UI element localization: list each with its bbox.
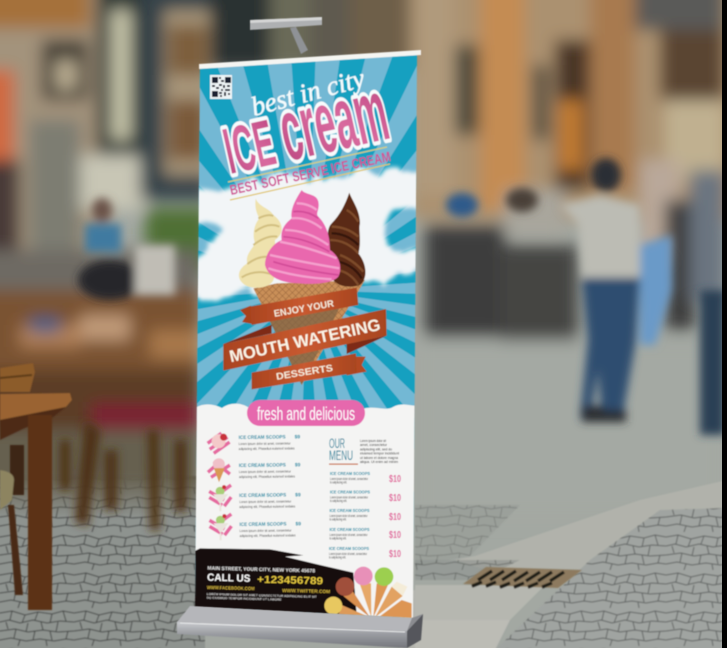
priced item 5: Lorem ipsum dolor sit amet, consectetur	[329, 552, 368, 556]
priced item 4: ICE CREAM SCOOPS	[330, 527, 370, 532]
banner hanger bar	[250, 17, 322, 54]
menu item 1: $9	[295, 434, 300, 440]
contact text: WWW.FACEBOOK.COM	[207, 585, 255, 591]
ribbon: enjoy your: ENJOY YOUR	[273, 299, 335, 320]
menu item 1: Lorem ipsum dolor sit amet, consectetur	[239, 441, 291, 446]
wooden table and chair, foreground left	[0, 363, 72, 610]
left menu column	[208, 432, 301, 540]
contact text: DO EIUSMOD TEMPOR INCIDIDUNT UT LABORE	[207, 596, 282, 602]
priced item 2: Lorem ipsum dolor sit amet, consectetur	[330, 496, 369, 500]
icon: waffle cones	[253, 280, 365, 385]
menu item 1: ICE CREAM SCOOPS	[239, 435, 286, 441]
ribbon: desserts	[252, 353, 367, 389]
menu item 4: Lorem ipsum dolor sit amet, consectetur	[240, 528, 292, 533]
heading: our menu: OUR	[329, 436, 345, 451]
icon: pink swirl	[265, 190, 340, 284]
roll-up banner poster: cream	[270, 61, 396, 180]
priced item 5: $10	[389, 549, 401, 560]
title: Ice Cream	[213, 61, 396, 193]
priced item 3: to adipiscing elit.	[330, 518, 347, 522]
menu intro paragraph: adipiscing elit, sed do	[360, 448, 392, 452]
right menu column	[329, 436, 401, 560]
menu item 4: ICE CREAM SCOOPS	[239, 522, 287, 528]
black brush contact strip	[193, 548, 412, 619]
heading: our menu: MENU	[329, 448, 353, 463]
drain grate	[463, 567, 582, 588]
contact text	[207, 566, 331, 603]
poster artwork	[194, 54, 418, 618]
icon: vanilla swirl	[239, 198, 282, 288]
cobblestone ground	[0, 476, 727, 648]
illustration: three ice cream cones with ribbons	[223, 190, 387, 389]
blurred cafe chair legs	[60, 420, 186, 530]
white lower panel	[190, 404, 420, 630]
priced item 2: to adipiscing elit.	[330, 499, 347, 503]
priced item 3: Lorem ipsum dolor sit amet, consectetur	[330, 514, 368, 518]
black strip at right edge	[722, 0, 727, 648]
priced item 1: $10	[389, 474, 401, 485]
ribbon: desserts: DESSERTS	[275, 363, 334, 383]
priced item 5: ICE CREAM SCOOPS	[329, 546, 369, 551]
menu item 3	[209, 484, 301, 511]
menu intro paragraph	[360, 439, 399, 464]
priced item 1	[330, 471, 401, 485]
contact text: MAIN STREET, YOUR CITY, NEW YORK 45678	[207, 566, 315, 574]
menu item 2: $9	[295, 462, 301, 468]
menu item 2: adipiscing elit. Phasellus euismod sodales	[239, 474, 295, 479]
priced item 1: to adipiscing elit.	[330, 480, 347, 484]
priced item 4: Lorem ipsum dolor sit amet, consectetur	[330, 533, 368, 537]
priced item 4: to adipiscing elit.	[330, 536, 347, 540]
contact text: +123456789	[257, 575, 323, 587]
menu item 1: adipiscing elit. Phasellus euismod sodales	[239, 446, 295, 451]
subtitle: best soft serve ice cream	[228, 147, 392, 200]
contact text: CALL US	[207, 573, 251, 585]
ribbon: mouth watering: MOUTH WATERING	[228, 315, 382, 366]
menu item 3: adipiscing elit. Phasellus euismod sodales	[239, 504, 296, 509]
QR code	[210, 75, 232, 99]
menu item 4: adipiscing elit. Phasellus euismod sodales	[240, 533, 296, 538]
priced item 3	[330, 508, 401, 523]
priced item 5	[329, 546, 401, 560]
priced item 2: ICE CREAM SCOOPS	[330, 490, 370, 495]
pill: fresh and delicious	[247, 400, 365, 426]
contact text: LOREM IPSUM DOLOR SIT AMET CONSECTETUR ADIPISCING ELIT SIT	[207, 592, 317, 599]
menu item 3: Lorem ipsum dolor sit amet, consectetur	[239, 499, 292, 504]
priced item 2: $10	[389, 493, 401, 504]
menu intro paragraph: amet, consectetur	[360, 443, 388, 447]
menu intro paragraph: ut labore et dolore magna	[360, 456, 398, 460]
sunburst background	[195, 54, 418, 612]
title: Ice Cream: ICE	[217, 106, 281, 188]
heading: our menu	[329, 436, 353, 463]
slogan: best in city: best in city	[248, 63, 368, 122]
subtitle: best soft serve ice cream: BEST SOFT SERVE ICE CREAM	[228, 148, 392, 198]
priced item 3: $10	[389, 512, 401, 523]
ribbon: enjoy your	[240, 288, 358, 325]
roll-up banner poster	[194, 50, 422, 618]
menu item 2: Lorem ipsum dolor sit amet, consectetur	[239, 469, 292, 474]
priced item 4	[330, 527, 401, 541]
priced item 1: Lorem ipsum dolor sit amet, consectetur	[330, 477, 369, 481]
menu item 2: ICE CREAM SCOOPS	[239, 463, 286, 469]
menu item 4: $9	[295, 521, 301, 527]
icon: fan of ice cream cones	[324, 567, 412, 619]
menu item 4	[209, 513, 301, 540]
top white edge of banner	[199, 50, 421, 69]
clouds	[180, 168, 430, 300]
menu intro paragraph: Lorem ipsum dolor sit	[360, 439, 386, 443]
menu item 3: $9	[295, 492, 301, 498]
menu item 3: ICE CREAM SCOOPS	[239, 493, 287, 499]
menu item 1	[208, 432, 300, 453]
contact text: WWW.TWITTER.COM	[282, 588, 330, 594]
priced item 3: ICE CREAM SCOOPS	[330, 508, 370, 513]
icon: chocolate swirl	[328, 193, 365, 287]
priced item 1: ICE CREAM SCOOPS	[330, 471, 370, 476]
menu item 2	[208, 457, 301, 482]
menu intro paragraph: aliqua. Ut enim ad minim	[360, 460, 398, 464]
pill: fresh and delicious: fresh and delicious	[257, 404, 355, 424]
menu intro paragraph: eiusmod tempor incididunt	[360, 452, 399, 456]
priced item 5: to adipiscing elit.	[329, 556, 346, 560]
metal banner base	[177, 606, 423, 648]
priced item 2	[330, 490, 401, 504]
priced item 4: $10	[389, 530, 401, 541]
